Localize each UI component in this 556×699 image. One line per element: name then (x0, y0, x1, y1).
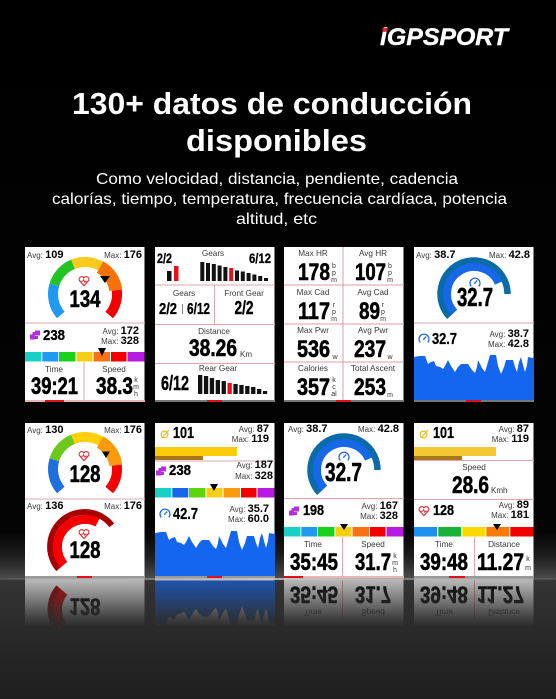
time and speed fields: h (393, 567, 397, 574)
panel: screen 4 speed gauge and chart: Max: 42.8 (488, 338, 529, 350)
time and speed fields: Time (45, 365, 63, 374)
page indicator (25, 400, 145, 402)
panel: screen 5 dual heart rate gauges: 128 (70, 461, 100, 488)
panel: screen 6 cadence, power, speed chart: 42.7 (173, 506, 198, 523)
panel: screen 4 speed gauge and chart: Avg: 38.7 (489, 328, 529, 340)
heart rate fields: 178 (298, 259, 330, 286)
panel: screen 7 speed gauge, power, time, speed: Max: 328 (360, 510, 398, 522)
heart rate fields: m (331, 277, 337, 284)
cadence bars (155, 447, 237, 460)
time and distance fields: k (526, 556, 530, 563)
cadence fields (297, 288, 389, 325)
floor reflection of the lower screens: 128 (70, 592, 100, 620)
gears summary: 6/12 (249, 250, 271, 266)
speed field: Speed (462, 463, 486, 472)
gears and front gear fields: 2/2 (234, 298, 254, 318)
panel: screen 3 data grid (284, 247, 404, 402)
time and distance fields: Time (435, 540, 453, 549)
time and speed fields: Time (304, 540, 322, 549)
panel: screen 6 cadence, power, speed chart: 101 (173, 425, 194, 442)
panel: screen 1 heart rate, power, time, speed: Max: 176 (104, 249, 142, 261)
gears summary: Gears (202, 249, 224, 258)
speed gauge (311, 436, 378, 493)
panel: screen 1 heart rate, power, time, speed: 238 (43, 327, 65, 344)
floor reflection of the lower screens (0, 578, 556, 627)
cadence fields: m (380, 316, 386, 323)
time and speed fields: 31.7 (355, 549, 391, 576)
page indicator (155, 400, 275, 402)
power fields: 536 (297, 336, 330, 363)
panel: screen 8 cadence, speed, heart rate, distance: 128 (433, 502, 454, 519)
speed area chart (155, 530, 275, 576)
subtitle text: calorías, tiempo, temperatura, frecuencia cardíaca, potencia (52, 191, 507, 208)
panel: screen 6 cadence, power, speed chart: Max: 119 (232, 433, 269, 445)
speed gauge (441, 260, 508, 317)
glow line on the floor (0, 578, 556, 580)
calories and ascent fields: al (331, 391, 337, 398)
power zone bar (155, 484, 274, 498)
heart rate fields: Avg HR (359, 249, 387, 258)
panel: screen 7 speed gauge, power, time, speed: 32.7 (325, 457, 362, 487)
power readout (156, 466, 166, 476)
time and distance fields (420, 537, 531, 576)
panel: screen 6 cadence, power, speed chart: 238 (169, 462, 191, 479)
panel: screen 7 speed gauge, power, time, speed: Avg: 167 (362, 500, 398, 512)
distance field: Distance (198, 327, 230, 336)
gears and front gear fields: 6/12 (187, 301, 210, 318)
floor reflection of the lower screens: Time (304, 608, 322, 616)
speed averages: Avg: 38.7 (288, 423, 328, 435)
panel: screen 6 cadence, power, speed chart (155, 423, 275, 578)
red gauge (50, 512, 112, 569)
speed readout (419, 334, 429, 342)
speed field: Kmh (491, 486, 507, 495)
cadence fields: m (331, 316, 337, 323)
calories and ascent fields: 253 (354, 374, 386, 401)
subtitle text: Como velocidad, distancia, pendiente, cadencia (96, 171, 458, 188)
time and distance fields: 11.27 (477, 549, 524, 576)
heart rate fields: b (332, 263, 336, 270)
power fields: w (386, 354, 393, 361)
calories and ascent fields: m (387, 392, 393, 399)
power fields: 237 (354, 336, 386, 363)
distance field: Km (240, 350, 252, 359)
power zone bar (284, 524, 404, 536)
subtitle text: altitud, etc (236, 211, 317, 228)
title (72, 86, 472, 158)
rear gear field (161, 364, 267, 395)
time and speed fields (31, 362, 139, 400)
cadence readout (420, 430, 428, 438)
gears and front gear fields: Gears (173, 289, 195, 298)
panel: screen 7 speed gauge, power, time, speed (284, 423, 404, 578)
floor reflection of the lower screens: Distance (488, 608, 520, 616)
floor reflection of the lower screens: 11.27 (477, 580, 524, 608)
page indicator (25, 576, 145, 578)
panel: screen 8 cadence, speed, heart rate, distance: Max: 119 (492, 433, 529, 445)
cadence fields: 89 (359, 298, 380, 325)
panel: screen 4 speed gauge and chart: 32.7 (457, 282, 493, 312)
calories and ascent fields (297, 364, 396, 401)
panel: screen 8 cadence, speed, heart rate, distance: Avg: 87 (499, 423, 529, 435)
subtitle text (52, 171, 507, 228)
panel: screen 1 heart rate, power, time, speed: Avg: 172 (103, 325, 139, 337)
time and distance fields: Distance (488, 540, 520, 549)
calories and ascent fields: k (332, 377, 336, 384)
panel: screen 6 cadence, power, speed chart: Avg: 35.7 (229, 503, 269, 515)
panel: screen 8 cadence, speed, heart rate, distance (414, 423, 534, 578)
time and distance fields: m (525, 565, 531, 572)
zone gauge (53, 437, 117, 490)
page indicator (284, 400, 404, 402)
gears and front gear fields: Front Gear (224, 289, 264, 298)
speed averages: Avg: 38.7 (416, 249, 456, 261)
time and speed fields: k (134, 377, 138, 384)
power fields (297, 326, 393, 363)
time and distance fields: 39:48 (420, 549, 468, 576)
panel: screen 4 speed gauge and chart (414, 247, 534, 402)
rear gear field: 6/12 (161, 373, 189, 395)
cadence fields: 117 (298, 298, 330, 325)
panel: screen 6 cadence, power, speed chart: Avg: 87 (239, 423, 269, 435)
calories and ascent fields: Calories (298, 364, 328, 373)
heart rate averages: Avg: 109 (27, 249, 63, 261)
panel: screen 7 speed gauge, power, time, speed: 198 (303, 502, 324, 519)
cadence fields: r (333, 302, 336, 309)
speed field (452, 463, 507, 499)
panel: screen 6 cadence, power, speed chart: Max: 60.0 (228, 513, 269, 525)
gears and front gear fields (159, 285, 264, 324)
heart rate averages: Avg: 130 (27, 424, 63, 436)
floor reflection of the lower screens: Time (435, 608, 453, 616)
floor reflection of the lower screens: 39:48 (420, 580, 468, 608)
power readout (289, 506, 299, 516)
heart rate fields: m (387, 277, 393, 284)
heart rate zone bar (414, 524, 534, 536)
power readout (30, 330, 40, 340)
page indicator (155, 576, 275, 578)
cadence fields: p (381, 309, 385, 316)
heart rate fields: Max HR (298, 249, 328, 258)
time and speed fields: m (392, 560, 398, 567)
power fields: w (331, 354, 338, 361)
heart rate fields: p (332, 270, 336, 277)
heart rate fields: p (388, 270, 392, 277)
power zone bar (25, 348, 144, 362)
power fields: Max Pwr (297, 326, 329, 335)
rear gear field: Rear Gear (199, 364, 237, 373)
cadence bars (414, 447, 496, 460)
panel: screen 1 heart rate, power, time, speed: 134 (70, 286, 101, 313)
time and speed fields: 35:45 (290, 549, 338, 576)
panel: screen 1 heart rate, power, time, speed (25, 247, 145, 402)
panel: screen 8 cadence, speed, heart rate, distance: 101 (433, 425, 454, 442)
panel: screen 8 cadence, speed, heart rate, distance: Max: 181 (491, 509, 529, 521)
floor reflection of the lower screens: Speed (361, 608, 385, 616)
panel: screen 2 gears and distance (155, 247, 275, 402)
time and speed fields: h (134, 391, 138, 398)
page indicator (414, 576, 534, 578)
floor reflection of the lower screens: 31.7 (355, 580, 391, 608)
heart rate gauge (53, 262, 117, 315)
cadence readout (161, 430, 169, 438)
panel: screen 6 cadence, power, speed chart: Avg: 187 (237, 459, 273, 471)
cadence fields: r (382, 302, 385, 309)
heart rate fields: b (388, 263, 392, 270)
time and speed fields: 38.3 (96, 373, 133, 400)
time and speed fields: Speed (361, 540, 385, 549)
title: 130+ datos de conducción (72, 86, 472, 121)
logo: iGPSPORT: iGPSPORT (380, 24, 510, 51)
grid lines (284, 247, 404, 400)
calories and ascent fields: 357 (297, 374, 330, 401)
floor reflection of the lower screens: 35:45 (290, 580, 338, 608)
cadence fields: Avg Cad (357, 288, 389, 297)
panel: screen 5 dual heart rate gauges: Max: 176 (104, 424, 142, 436)
power fields: Avg Pwr (358, 326, 388, 335)
title: disponibles (186, 123, 367, 158)
page indicator (284, 576, 404, 578)
calories and ascent fields: Total Ascent (351, 364, 396, 373)
heart rate fields: 107 (355, 259, 386, 286)
panel: screen 5 dual heart rate gauges: Max: 176 (104, 500, 142, 512)
panel: screen 6 cadence, power, speed chart: Max: 328 (235, 470, 273, 482)
time and speed fields (290, 537, 398, 576)
panel: screen 4 speed gauge and chart: Max: 42.8 (489, 249, 530, 261)
panel: screen 5 dual heart rate gauges (25, 423, 145, 578)
heart rate readout (419, 507, 429, 516)
time and speed fields: m (133, 384, 139, 391)
panel: screen 8 cadence, speed, heart rate, distance: Avg: 89 (499, 499, 529, 511)
speed area chart (414, 354, 534, 400)
time and speed fields: k (393, 553, 397, 560)
second heart rate averages: Avg: 136 (27, 500, 63, 512)
gears summary: 2/2 (157, 250, 172, 266)
speed field: 28.6 (452, 472, 489, 499)
distance field: 38.26 (189, 335, 237, 362)
gears summary (157, 249, 271, 281)
panel: screen 5 dual heart rate gauges: 128 (70, 537, 100, 564)
panel: screen 7 speed gauge, power, time, speed: Max: 42.8 (358, 423, 399, 435)
cadence fields: p (332, 309, 336, 316)
gears and front gear fields: 2/2 (159, 301, 177, 318)
panel: screen 1 heart rate, power, time, speed: Max: 328 (101, 335, 139, 347)
panel: screen 4 speed gauge and chart: 32.7 (432, 331, 457, 348)
page indicator (414, 400, 534, 402)
time and speed fields: Speed (102, 365, 126, 374)
calories and ascent fields: c (332, 384, 336, 391)
time and speed fields: 39:21 (31, 373, 78, 400)
heart rate fields (298, 249, 393, 286)
speed readout (160, 509, 170, 517)
cadence fields: Max Cad (297, 288, 330, 297)
